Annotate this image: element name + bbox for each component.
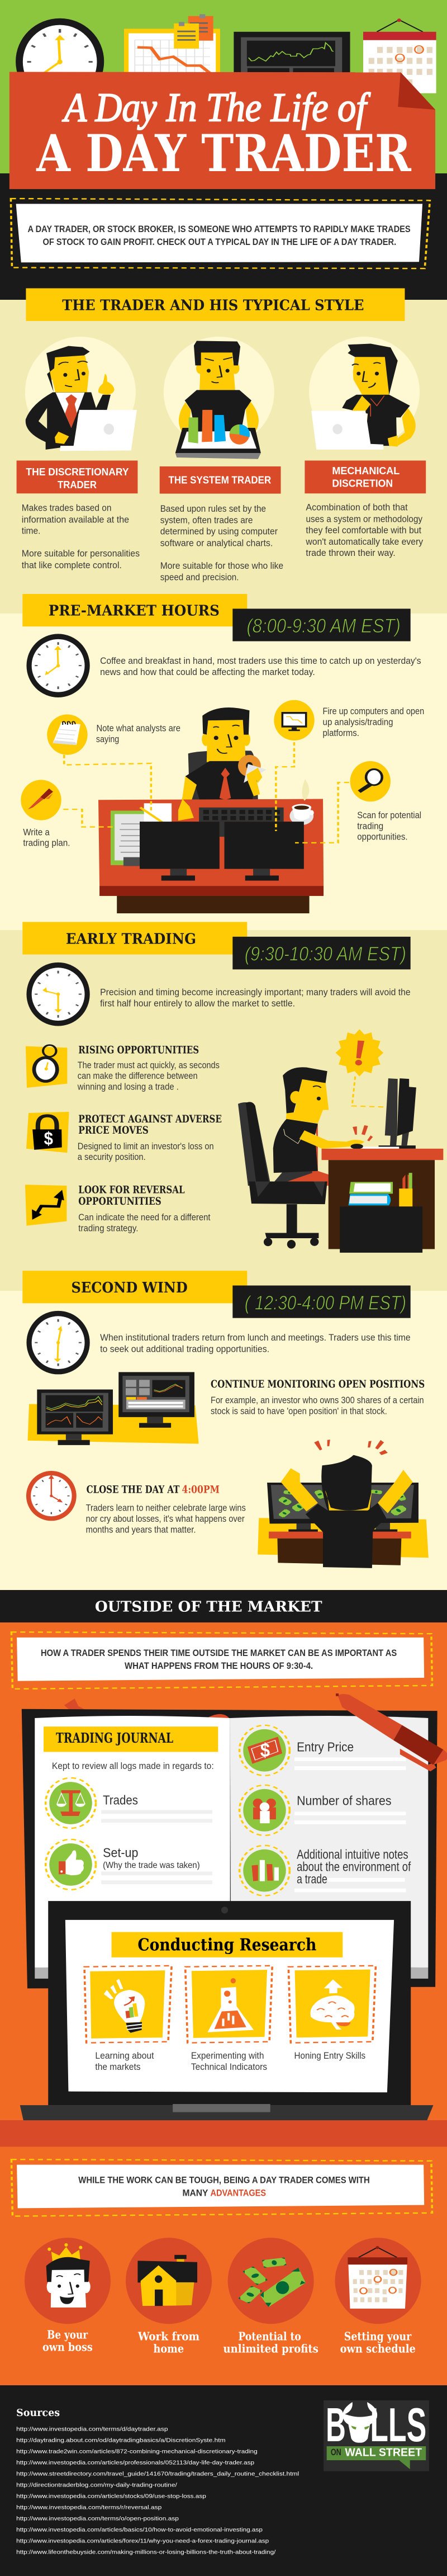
text: system trader description: [160, 504, 283, 582]
advantage: be your own boss: [25, 2238, 111, 2354]
callout: scan for potential trading opportunities: opportunities.: [357, 832, 408, 842]
heading: early trading: EARLY TRADING: [66, 930, 196, 947]
advantage: be your own boss: Be your: [47, 2329, 88, 2342]
list of source urls: http://directiontraderblog.com/my-daily-trading-routine/: [16, 2481, 177, 2488]
list of source urls: http://www.trade2win.com/articles/872-combining-mechanical-discretionary-trading: [16, 2448, 258, 2455]
text: mechanical discretion description: [306, 503, 424, 558]
section: advantages: [11, 2104, 434, 2356]
badge: entry price: Entry Price: [297, 1740, 354, 1754]
dashed connectors: [63, 742, 349, 843]
heading: conducting research: [111, 1932, 343, 1957]
item: rising opportunities: can make the difference between: [78, 1071, 198, 1081]
card: experimenting with technical indicators: [186, 1966, 272, 2043]
advantage: work from home: [126, 2238, 212, 2356]
list of source urls: http://www.investopedia.com/articles/basics/10/how-to-avoid-emotional-investing.asp: [16, 2526, 263, 2533]
label: mechanical discretion: [305, 460, 426, 493]
item: protect against adverse price moves: Designed to limit an investor's loss on: [78, 1141, 214, 1152]
heading: sources: Sources: [16, 2407, 60, 2419]
label: the system trader: THE SYSTEM TRADER: [169, 474, 271, 486]
panel: tablet conducting research: [48, 1901, 411, 2105]
icon: clock at eight: [26, 634, 90, 697]
item: protect against adverse price moves: $: [44, 1128, 53, 1148]
heading: pre-market hours: PRE-MARKET HOURS: [49, 602, 220, 619]
text: discretionary trader description: More suitable for personalities: [22, 549, 140, 559]
item: rising opportunities: RISING OPPORTUNITIES: [78, 1044, 199, 1056]
callout: note what analysts are saying: Note what analysts are: [96, 723, 180, 733]
item: look for reversal opportunities: [25, 1183, 211, 1233]
list of source urls: http://www.streetdirectory.com/travel_guide/141670/trading/traders_daily_routine_checklist.html: [16, 2470, 299, 2477]
callout: while the work can be tough: ADVANTAGES: [211, 2188, 266, 2198]
text: discretionary trader description: that like complete control.: [22, 560, 122, 570]
text: coffee and breakfast: news and how that could be affecting the market today.: [100, 667, 315, 677]
list of source urls: http://www.investopedia.com/articles/stocks/09/use-stop-loss.asp: [16, 2493, 206, 2499]
illustration: celebrating trader at monitors: [258, 1455, 429, 1568]
text: institutional traders: to seek out additional trading opportunities.: [100, 1344, 269, 1354]
caption text for research cards: Learning about: [95, 2051, 154, 2061]
text: close the day at 4:00pm: months and years that matter.: [86, 1525, 196, 1535]
badge: additional intuitive notes: a trade: [297, 1872, 327, 1886]
heading: early trading: [22, 922, 247, 955]
item: protect against adverse price moves: a security position.: [78, 1152, 146, 1162]
label: mechanical discretion: DISCRETION: [332, 478, 393, 489]
section: the trader and his typical style: [17, 288, 426, 582]
label: the discretionary trader: TRADER: [58, 479, 97, 491]
text: institutional traders: [100, 1333, 411, 1354]
badge: set-up: (Why the trade was taken): [103, 1861, 200, 1870]
header section: [9, 14, 436, 268]
section: pre-market hours: [21, 594, 424, 913]
text: discretionary trader description: [22, 503, 140, 570]
heading: second wind: [22, 1271, 247, 1303]
icon: wall clock: [16, 18, 104, 105]
caption text for research cards: [95, 2051, 365, 2072]
text: discretionary trader description: time.: [22, 526, 40, 536]
icon: clock at half past twelve: [26, 1311, 90, 1374]
illustration: trader at desk side view: [238, 1067, 443, 1253]
card: honing entry skills: [288, 1966, 375, 2043]
list of source urls: http://www.investopedia.com/articles/professionals/052113/day-life-day-trader.asp: [16, 2459, 254, 2466]
badge: additional intuitive notes: [240, 1846, 411, 1896]
celebration sparks: [314, 1440, 388, 1455]
illustration: alert burst: [336, 1029, 386, 1107]
badge: set-up: Set-up: [103, 1846, 138, 1860]
illustration: system trader with tablet charts: [164, 337, 274, 459]
heading: trading journal: TRADING JOURNAL: [56, 1730, 173, 1746]
callout: while the work can be tough: [11, 2159, 432, 2216]
time display: 9:30-10:30 AM EST: [232, 937, 411, 969]
list of source urls: http://www.investopedia.com/terms/o/open-position.asp: [16, 2515, 179, 2522]
text: discretionary trader description: information available at the: [22, 515, 129, 525]
label: the system trader: [160, 466, 281, 494]
panel: trading journal notebook: [22, 1693, 447, 1988]
illustration: discretionary trader with laptop: [25, 337, 137, 451]
list of source urls: http://www.investopedia.com/terms/d/daytrader.asp: [16, 2426, 168, 2432]
coffee cup: [289, 779, 314, 825]
label: the discretionary trader: THE DISCRETIONARY: [26, 466, 129, 478]
text: close the day at 4:00pm: nor cry about losses, it's what happens over: [86, 1514, 245, 1524]
callout: fire up computers: up analysis/trading: [323, 718, 393, 728]
list of source urls: [16, 2426, 299, 2555]
icon: hanging calendar: [363, 18, 436, 93]
desk with trader illustration: [98, 707, 324, 913]
label: mechanical discretion: MECHANICAL: [332, 465, 400, 477]
advantage: setting your own schedule: [335, 2238, 421, 2356]
heading banner: the trader and his typical style: [26, 288, 405, 321]
caption text for research cards: Technical Indicators: [191, 2062, 267, 2072]
caption text for research cards: Honing Entry Skills: [294, 2051, 365, 2061]
title banner: [9, 72, 435, 189]
text: close the day at 4:00pm: [86, 1483, 246, 1535]
item: protect against adverse price moves: PRICE MOVES: [78, 1124, 149, 1136]
text: system trader description: More suitable for those who like: [160, 561, 283, 571]
item: look for reversal opportunities: Can indicate the need for a different: [78, 1212, 211, 1223]
desk top: [98, 799, 324, 886]
text: precision and timing: first half hour entirely to allow the market to settle.: [100, 999, 295, 1009]
badge: entry price: $: [260, 1740, 270, 1761]
intro callout box: [11, 199, 430, 268]
item: look for reversal opportunities: LOOK FOR REVERSAL: [78, 1183, 185, 1196]
twin monitors: [140, 821, 304, 881]
item: rising opportunities: The trader must act quickly, as seconds: [78, 1060, 220, 1070]
text: kept to review: Kept to review all logs made in regards to:: [52, 1761, 214, 1771]
section: journal items and research tablet: [46, 1778, 411, 2105]
item: look for reversal opportunities: OPPORTUNITIES: [78, 1195, 161, 1207]
advantage: potential to unlimited profits: unlimited profits: [223, 2342, 318, 2356]
advantage: be your own boss: own boss: [42, 2341, 93, 2354]
advantage: potential to unlimited profits: Potential to: [239, 2330, 301, 2343]
card: learning about the markets: [84, 1966, 172, 2043]
time display: 12:30-4:00 PM EST: [232, 1286, 411, 1318]
callout: how a trader spends their time: [11, 1632, 432, 1689]
list of source urls: http://www.lifeonthebuyside.com/making-millions-or-losing-billions-the-truth-about-trading/: [16, 2549, 276, 2555]
icon: clock at half past nine: [26, 963, 90, 1026]
item: rising opportunities: [26, 1044, 220, 1092]
callout: scan for potential trading opportunities: trading: [357, 822, 383, 832]
text: system trader description: system, often trades are: [160, 515, 253, 525]
item: protect against adverse price moves: PROTECT AGAINST ADVERSE: [78, 1113, 222, 1125]
badge: set-up: [46, 1839, 212, 1890]
time display: 8:00-9:30 AM EST: [232, 608, 411, 641]
list of source urls: http://www.investopedia.com/terms/r/reversal.asp: [16, 2504, 161, 2511]
text: system trader description: software or analytical charts.: [160, 538, 273, 548]
text: system trader description: speed and precision.: [160, 572, 239, 582]
section: close the day: [11, 1455, 447, 1988]
text: continue monitoring open positions: [211, 1378, 425, 1416]
callout: write a trading plan: trading plan.: [23, 838, 70, 848]
illustration: two chart monitors: [27, 1372, 199, 1445]
callout: write a trading plan: [21, 780, 70, 848]
text: precision and timing: [100, 987, 411, 1009]
heading: pre-market hours: [22, 594, 247, 626]
icon: red clock at four: [26, 1471, 77, 1521]
callout: note what analysts are saying: saying: [96, 734, 119, 744]
callout: scan for potential trading opportunities: [350, 761, 421, 842]
text: coffee and breakfast: [100, 656, 421, 677]
heading: second wind: SECOND WIND: [72, 1279, 188, 1296]
item: protect against adverse price moves: [26, 1112, 222, 1162]
heading: outside of the market: OUTSIDE OF THE MARKET: [95, 1598, 322, 1615]
text: mechanical discretion description: trade thrown their way.: [306, 548, 396, 558]
logo: bulls on wall street: ON: [331, 2447, 341, 2457]
side desk: [322, 1149, 443, 1253]
logo: bulls on wall street: B: [326, 2399, 346, 2452]
callout: how a trader spends their time: WHAT HAPPENS FROM THE HOURS OF 9:30-4.: [125, 1661, 313, 1671]
chair: [238, 1102, 319, 1186]
callout: fire up computers: platforms.: [323, 728, 359, 738]
badge: trades: [46, 1778, 212, 1828]
section: sources and logo: [16, 2399, 429, 2555]
clipboard and trading plan: [111, 803, 172, 866]
icon: monitor with green chart: [234, 32, 350, 75]
icon: clipboard with falling chart and sticky notes: [124, 14, 220, 74]
label: the discretionary trader: [17, 460, 137, 493]
text: close the day at 4:00pm: CLOSE THE DAY AT: [87, 1483, 180, 1495]
heading: trading journal: [44, 1726, 218, 1752]
advantage: work from home: home: [153, 2342, 184, 2356]
side monitor: [363, 1078, 416, 1149]
icon: red pen: [336, 1693, 447, 1771]
illustration: mechanical discretion trader: [309, 337, 420, 450]
section: look for reversal and second wind: [22, 1182, 425, 1455]
callout: write a trading plan: Write a: [23, 827, 50, 837]
desk chair base: [249, 1182, 327, 1249]
laptop base: [20, 2104, 434, 2120]
text: discretionary trader description: Makes trades based on: [22, 503, 111, 513]
badge: number of shares: Number of shares: [297, 1794, 392, 1808]
caption text for research cards: the markets: [95, 2062, 141, 2072]
item: rising opportunities: winning and losing a trade .: [77, 1082, 179, 1092]
caption text for research cards: Experimenting with: [191, 2051, 264, 2061]
text: system trader description: determined by using computer: [160, 527, 278, 537]
item: look for reversal opportunities: trading strategy.: [78, 1223, 138, 1233]
text: close the day at 4:00pm: Traders learn to neither celebrate large wins: [86, 1503, 246, 1513]
advantage: potential to unlimited profits: [223, 2238, 318, 2356]
logo: bulls on wall street: [324, 2399, 429, 2471]
badge: entry price: [240, 1725, 406, 1776]
callout: fire up computers: [274, 700, 424, 740]
badge: number of shares: [240, 1785, 406, 1836]
text: close the day at 4:00pm: 4:00PM: [182, 1483, 220, 1495]
callout: while the work can be tough: MANY: [183, 2188, 208, 2198]
heading: conducting research: Conducting Research: [137, 1935, 316, 1955]
advantage: work from home: Work from: [137, 2330, 199, 2343]
section: early trading: [22, 922, 443, 1253]
keyboard: [199, 808, 284, 822]
list of source urls: http://www.investopedia.com/articles/forex/11/why-you-need-a-forex-trading-journal.asp: [16, 2537, 269, 2544]
list of source urls: http://daytrading.about.com/od/daytradingbasics/a/DiscretionSyste.htm: [16, 2437, 226, 2443]
text: system trader description: Based upon rules set by the: [160, 504, 266, 514]
callout: note what analysts are saying: [47, 714, 180, 755]
badge: trades: Trades: [103, 1793, 138, 1808]
